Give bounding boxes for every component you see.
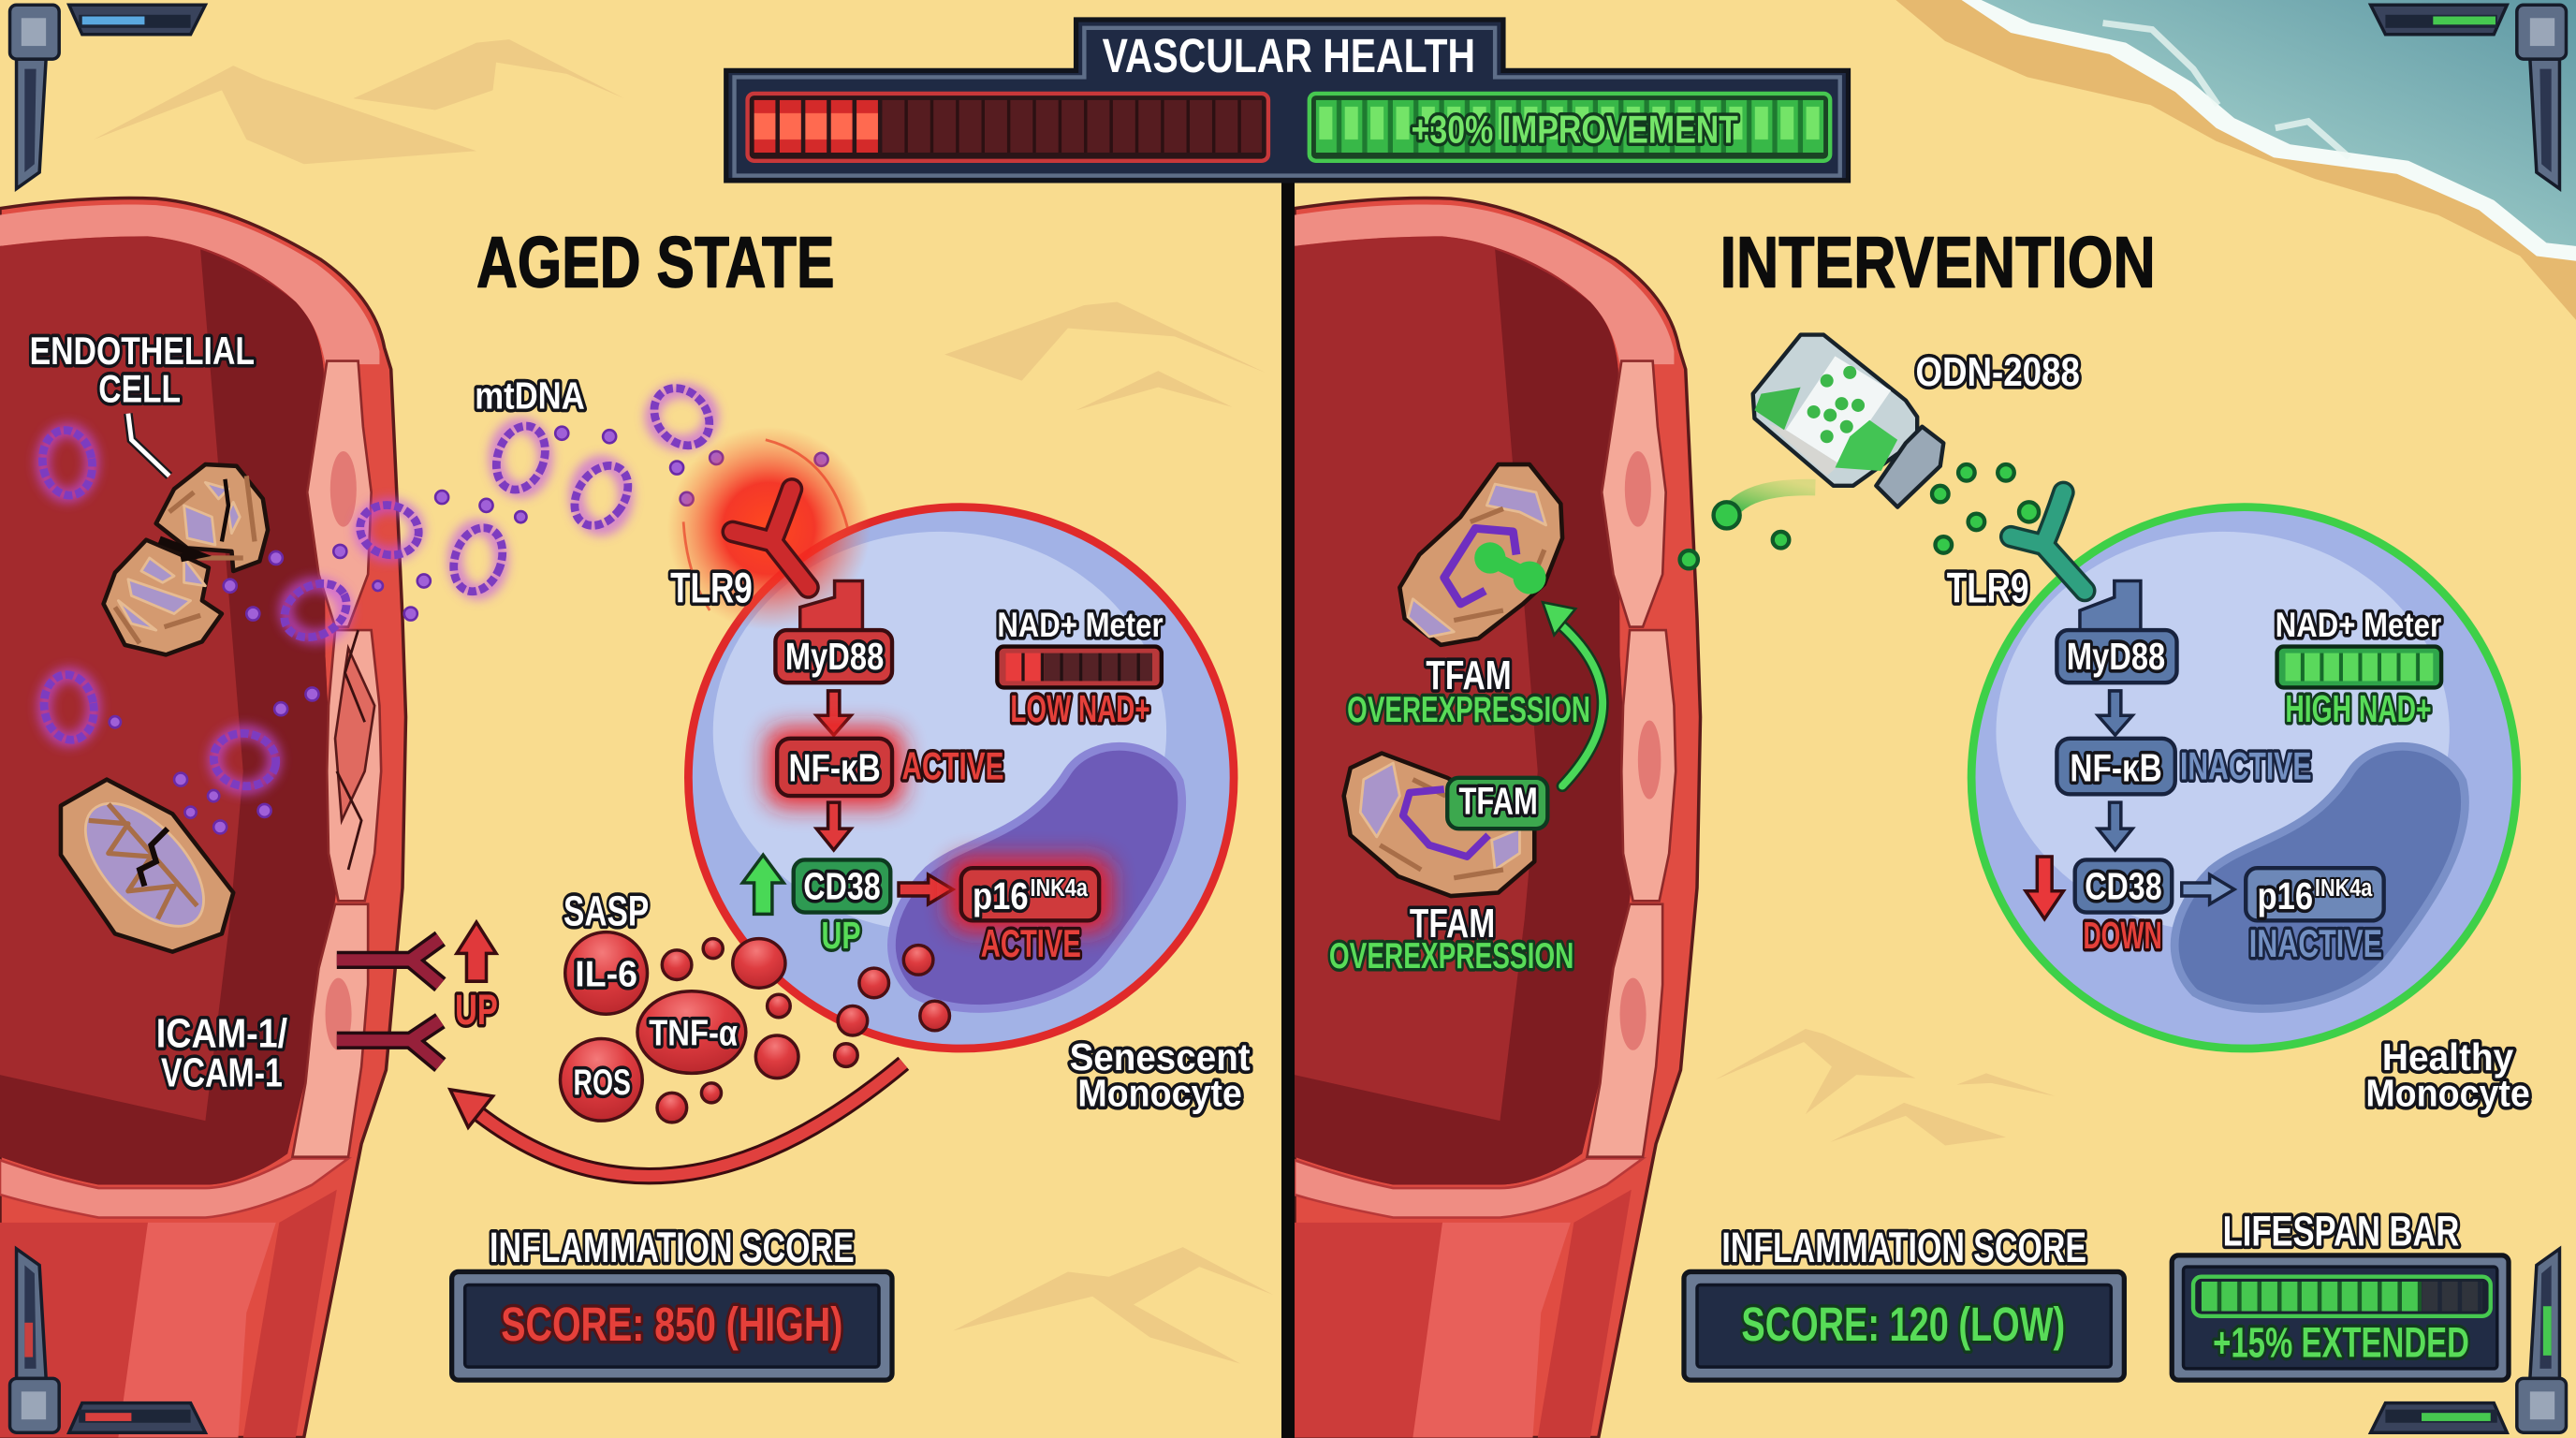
inflammation score: aged: INFLAMMATION SCORE [490,1224,855,1271]
label: ICAM-1 / VCAM-1: VCAM-1 [161,1049,283,1095]
node: MyD88: MyD88 [2067,635,2165,678]
node: NF-κB inactive: NF-κB [2070,745,2162,789]
mitochondrion: upper repaired [1399,464,1562,645]
status: down: DOWN [2083,914,2162,957]
bubble: TNF-α [637,991,746,1073]
arrow: up green [742,855,783,914]
node: TFAM: TFAM [1459,779,1538,822]
nucleus [2174,746,2465,1008]
label: TFAM overexpression lower: OVEREXPRESSION [1329,936,1573,976]
label: TFAM overexpression upper: TFAM [1426,653,1512,698]
status: active: ACTIVE [902,744,1003,788]
bubble: IL-6 [565,932,648,1014]
panel: intervention [1295,198,2530,1437]
divider between panels [1281,177,1295,1438]
mitochondrion: lower broken piece [104,540,222,654]
lifespan bar: +15% EXTENDED [2213,1319,2469,1367]
heading: aged state: AGED STATE [476,223,835,303]
arrow [2098,802,2132,850]
label: NAD+ meter: NAD+ Meter [2276,606,2441,644]
mitochondrion: lower with TFAM [1344,754,1534,896]
top HUD: vascular health [726,20,1848,181]
label: senescent monocyte: Monocyte [1077,1071,1242,1114]
node: p16INK4a active: p16 [973,874,1029,917]
background: sand dunes [94,39,2056,1364]
arrow: to p16 [2182,874,2234,904]
lifespan bar: LIFESPAN BAR [2223,1207,2459,1255]
node: NF-κB active [766,727,903,807]
label: NAD+ meter: NAD+ Meter [997,606,1164,644]
bar: improvement: +30% IMPROVEMENT [1412,108,1738,151]
receptor highlight [2011,492,2085,591]
label: senescent monocyte: Senescent [1070,1035,1251,1078]
arrow: SASP curve to vessel [450,1064,903,1176]
title: VASCULAR HEALTH [1103,29,1475,82]
status: active: ACTIVE [981,921,1081,965]
node: p16INK4a inactive [2246,868,2384,920]
label: ICAM-1 / VCAM-1: ICAM-1/ [156,1010,287,1056]
node: p16INK4a active: INK4a [1030,873,1088,902]
heading: intervention: INTERVENTION [1720,223,2156,303]
inflammation score: intervention [1684,1224,2124,1380]
SASP secretions [657,939,949,1123]
arrow [2098,691,2132,735]
vessel: aged [0,198,406,1437]
corner HUD: bottom right [2371,1249,2566,1432]
label: TFAM overexpression upper: OVEREXPRESSION [1347,690,1590,730]
bubble: IL-6: IL-6 [575,954,637,994]
mitochondrion: upper broken piece [156,464,268,571]
lifespan bar [2172,1207,2509,1380]
node: MyD88: MyD88 [785,635,884,678]
panel: aged state [0,198,1251,1437]
inflammation score: intervention: SCORE: 120 (LOW) [1741,1298,2065,1351]
bar: aged [748,94,1268,161]
label: senescent monocyte [1070,1035,1251,1114]
arrow: to p16 [899,874,953,904]
node: NF-κB inactive [2056,739,2175,794]
status: up: UP [822,914,861,957]
node: CD38 [2075,859,2172,913]
node: CD38: CD38 [803,865,881,908]
arrow: TFAM green curve [1543,602,1603,786]
bubble: ROS: ROS [574,1063,631,1103]
mtDNA fragments [37,377,828,833]
icon: ODN-2088 bottle [1753,335,1943,507]
label: endothelial cell: CELL [98,366,181,410]
inflammation score: aged: SCORE: 850 (HIGH) [501,1298,842,1351]
corner HUD: top left [10,5,205,189]
label: ODN-2088: ODN-2088 [1915,349,2080,395]
senescent monocyte cell [688,507,1234,1049]
receptor highlight [733,489,809,588]
status: low NAD+: LOW NAD+ [1010,687,1150,730]
label: mtDNA: mtDNA [475,374,585,417]
label: healthy monocyte: Healthy [2382,1035,2514,1078]
receptors: ICAM-1 and VCAM-1 [337,939,440,1065]
status: inactive: INACTIVE [2180,744,2311,788]
healthy monocyte cell [1971,507,2517,1049]
node: p16INK4a inactive: INK4a [2315,873,2373,902]
node: MyD88 [2056,630,2177,682]
label: healthy monocyte: Monocyte [2365,1071,2530,1114]
label: ICAM-1 / VCAM-1 [156,1010,287,1095]
node: CD38: CD38 [2085,865,2162,908]
vessel: healthy [1295,198,1701,1437]
arrow [816,691,851,735]
bubble: TNF-α: TNF-α [649,1014,738,1054]
status: inactive: INACTIVE [2249,921,2382,965]
node: p16INK4a active [948,857,1112,932]
bubble: ROS [560,1039,642,1121]
meter: low NAD+ [997,647,1162,687]
status: high NAD+: HIGH NAD+ [2285,687,2432,730]
label: TFAM overexpression lower [1329,901,1573,976]
status: up: UP [455,986,498,1034]
label: healthy monocyte [2365,1035,2530,1114]
corner HUD: top right [2371,5,2566,189]
label: TLR9: TLR9 [1947,564,2029,611]
glow: TLR9 activation [667,427,871,630]
receptor: TLR9 red [733,489,809,588]
adapter: MyD88 dock [2080,580,2141,632]
bar: improvement [1310,94,1830,161]
node: NF-κB active: NF-κB [788,745,881,789]
arrow: up red [457,922,496,981]
node: TFAM [1447,778,1547,829]
label: SASP: SASP [564,888,649,935]
node: CD38 [794,859,890,913]
nucleus [891,746,1182,1008]
label: endothelial cell [30,329,255,476]
node: p16INK4a inactive: p16 [2258,874,2313,917]
arrow [816,802,851,850]
inflammation score: aged [452,1224,892,1380]
meter: high NAD+ [2277,647,2441,687]
adapter: MyD88 dock [800,580,862,632]
label: endothelial cell: ENDOTHELIAL [30,329,255,373]
droplets [1680,464,2039,568]
node: MyD88 [775,630,892,682]
corner HUD: bottom left [10,1249,205,1432]
receptor: TLR9 teal [2011,492,2085,591]
label: TLR9: TLR9 [670,564,753,611]
background: ocean and shoreline [1895,0,2576,320]
arrow: down red [2026,857,2063,919]
label: TFAM overexpression upper [1347,653,1590,730]
label: TFAM overexpression lower: TFAM [1410,901,1495,946]
mitochondrion: cracked lower [61,780,233,952]
inflammation score: intervention: INFLAMMATION SCORE [1721,1224,2086,1271]
